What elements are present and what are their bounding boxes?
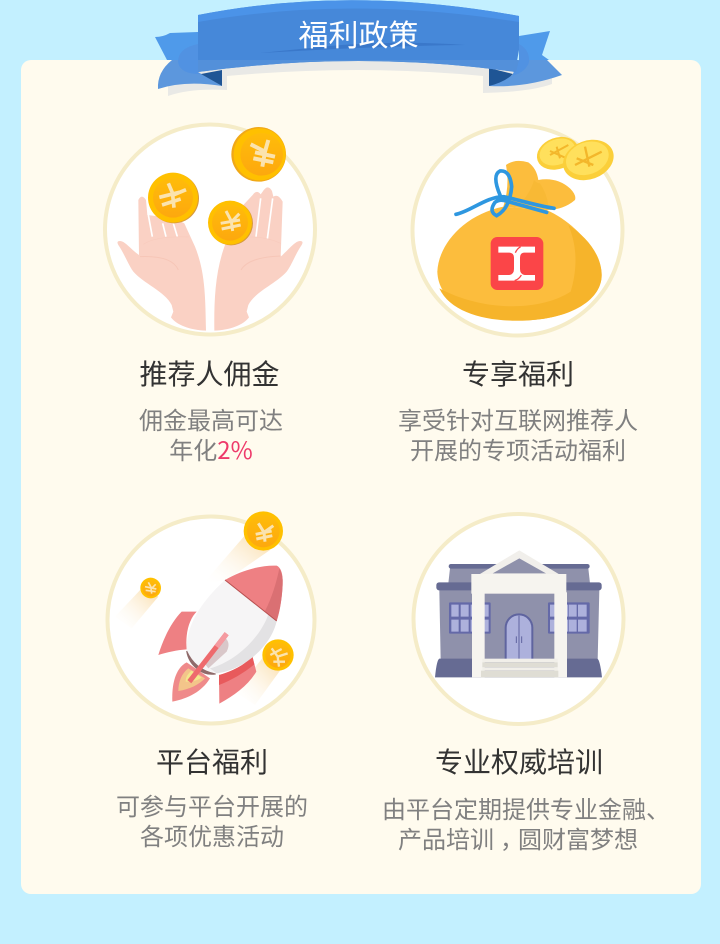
body: [187, 580, 277, 673]
panel: platform benefits: [108, 511, 314, 851]
icon: hands and coins: [117, 127, 303, 331]
description: 佣金最高可达: [139, 408, 283, 435]
description: 由平台定期提供专业金融、: [382, 797, 670, 824]
coin: [208, 201, 253, 245]
icon: building: [435, 550, 602, 677]
description with rate: 年化2%: [169, 431, 253, 466]
coins: [532, 131, 619, 187]
coin: [244, 511, 283, 551]
bag body: [437, 207, 602, 321]
description: 享受针对互联网推荐人: [398, 408, 638, 435]
columns: [471, 574, 567, 677]
fins: [158, 612, 197, 655]
steps: [481, 659, 558, 677]
description: 开展的专项活动福利: [410, 438, 626, 465]
flame: [172, 662, 210, 702]
banner heading: [155, 0, 562, 96]
upper wing: [448, 568, 590, 583]
icon: rocket and coins: [115, 511, 294, 705]
banner left tail: [155, 32, 222, 89]
ring: [412, 126, 622, 336]
icon: money bag: [437, 131, 619, 321]
ring: [108, 516, 314, 724]
coin: [148, 173, 199, 223]
heading: 推荐人佣金: [139, 359, 280, 390]
lower wing: [439, 590, 599, 660]
banner title: 福利政策: [298, 20, 418, 53]
banner left fold: [201, 70, 222, 86]
plinths: [435, 659, 602, 677]
portico wall: [484, 592, 555, 659]
description: 各项优惠活动: [140, 824, 284, 851]
bag neck: [503, 161, 575, 210]
heading: 专享福利: [462, 359, 574, 390]
banner main: [198, 0, 519, 72]
blue string: [456, 171, 554, 216]
pediment: [479, 550, 559, 574]
ring: [414, 514, 624, 724]
description: 产品培训，圆财富梦想: [398, 827, 638, 854]
heading: 专业权威培训: [435, 747, 603, 778]
coin: [140, 578, 161, 598]
ring: [105, 124, 315, 334]
logo: [491, 237, 543, 290]
panel: referral commission: [105, 124, 315, 466]
banner right tail: [489, 31, 562, 86]
banner shadow: [168, 55, 552, 96]
coin trails: [203, 533, 270, 583]
coin: [231, 127, 286, 182]
windows: [449, 602, 590, 634]
heading: 平台福利: [156, 747, 268, 778]
panel: professional training: [382, 514, 670, 854]
center fin: [203, 637, 229, 668]
panel: exclusive benefits: [398, 126, 638, 465]
coin: [262, 639, 294, 671]
door: [505, 613, 533, 659]
nose cone: [225, 566, 283, 621]
banner right fold: [489, 68, 513, 86]
description: 可参与平台开展的: [116, 794, 308, 821]
